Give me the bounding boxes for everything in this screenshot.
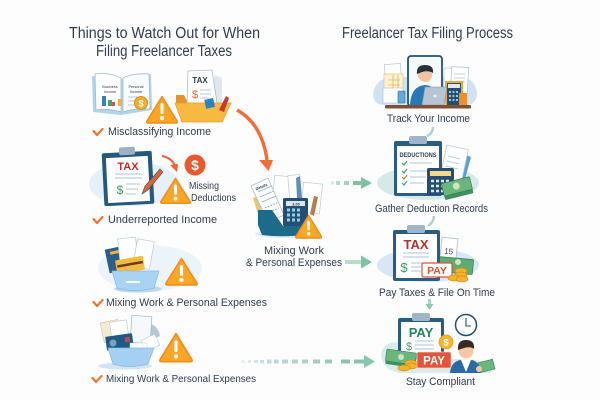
- icon: check: [94, 129, 102, 135]
- icon: dollar coin: [184, 154, 206, 176]
- icon: open ledger book: Income: [130, 90, 142, 94]
- blob: [373, 77, 477, 105]
- icon: check: [92, 376, 102, 382]
- icon: calculator: [445, 81, 467, 105]
- icon: documents right: [444, 67, 469, 93]
- icon: money stack: [436, 256, 474, 275]
- icon: cash in hand: [476, 359, 495, 373]
- icon: clipboard: $: [406, 341, 412, 353]
- icon: paper bowl: [105, 237, 162, 292]
- arrow: to pay taxes: [345, 256, 372, 268]
- icon: tax folder: [175, 70, 231, 122]
- label: Mixing Work: [264, 245, 324, 257]
- arrow: curved to gather: [427, 127, 433, 136]
- panel: stay compliant: [381, 313, 495, 388]
- right heading: Freelancer Tax Filing Process: [342, 25, 513, 42]
- icon: gold coin: $: [443, 338, 449, 348]
- icon: documents left: [383, 63, 405, 103]
- icon: open ledger book: Personal: [128, 85, 144, 89]
- icon: phone and person: [408, 56, 442, 106]
- label: Pay Taxes & File On Time: [379, 287, 495, 299]
- icon: open ledger book: Income: [104, 90, 116, 94]
- arrow: to stay compliant: [426, 299, 434, 310]
- icon: paper tray: Details: [255, 183, 268, 191]
- icon: clipboard: [398, 313, 444, 364]
- icon: coins: [398, 360, 417, 371]
- label: [246, 245, 342, 269]
- icon: money stack: [441, 177, 473, 200]
- icon: clipboard: [393, 225, 440, 281]
- icon: tax folder: TAX: [192, 76, 208, 85]
- icon: warning triangle: [147, 96, 177, 123]
- icon: person: [450, 340, 481, 373]
- icon: clipboard: PAY: [409, 325, 434, 340]
- left heading: Filing Freelancer Taxes: [96, 43, 232, 60]
- panel: pay taxes: [377, 225, 495, 299]
- icon: calculator: [427, 168, 454, 195]
- callout: missing deductions: Missing: [189, 181, 219, 192]
- blob: [98, 245, 202, 291]
- panel: track your income: [373, 56, 477, 125]
- panel: underreported income: [89, 147, 236, 226]
- label: Mixing Work & Personal Expenses: [106, 373, 256, 385]
- icon: open ledger book: $: [138, 98, 144, 108]
- panel: mixing expenses centre: [246, 175, 342, 269]
- icon: clipboard: DEDUCTIONS: [400, 152, 437, 159]
- icon: dollar coin: $: [191, 157, 199, 173]
- icon: clipboard: $: [400, 260, 408, 275]
- callout: missing deductions: [189, 181, 236, 204]
- icon: desk: [385, 105, 471, 108]
- icon: clipboard: TAX: [117, 161, 139, 173]
- icon: check: [94, 300, 102, 306]
- callout: missing deductions: Deductions: [191, 193, 236, 204]
- arrow: orange curve: [237, 110, 273, 171]
- label: Underreported Income: [108, 214, 217, 226]
- icon: calendar: 15: [444, 247, 454, 256]
- blob: [89, 162, 179, 206]
- panel: misclassifying income: [92, 70, 231, 138]
- arrow: long dotted to compliant: [242, 355, 375, 368]
- icon: coins: [448, 268, 468, 282]
- icon: clipboard: [102, 147, 154, 206]
- label: Mixing Work & Personal Expenses: [106, 297, 267, 309]
- left heading: [69, 25, 260, 60]
- label: Misclassifying Income: [108, 126, 211, 138]
- panel: mixing expenses 1: [94, 237, 267, 309]
- label: & Personal Expenses: [246, 257, 342, 269]
- panel: gather deduction records: [375, 136, 488, 215]
- icon: check: [94, 217, 102, 223]
- icon: pencil: [142, 169, 163, 194]
- icon: clipboard: TAX: [403, 237, 429, 252]
- icon: warning triangle: [160, 334, 192, 362]
- icon: laptop: [422, 87, 447, 105]
- icon: open ledger book: Business: [102, 85, 118, 89]
- icon: calculator: 3.00: [292, 202, 300, 206]
- icon: warning triangle: [296, 215, 322, 238]
- icon: warning triangle: [161, 178, 190, 203]
- panel: mixing expenses 2: [92, 315, 256, 385]
- icon: pay sign: PAY: [423, 356, 445, 368]
- arrow: curved to pay: [428, 216, 434, 226]
- left heading: Things to Watch Out for When: [69, 25, 260, 42]
- icon: clock: [456, 314, 476, 336]
- blob: [377, 166, 479, 200]
- label: Track Your Income: [387, 113, 470, 125]
- label: Stay Compliant: [406, 376, 475, 388]
- label: Gather Deduction Records: [375, 203, 488, 215]
- blob: [377, 248, 479, 282]
- icon: paper: [440, 145, 471, 190]
- icon: open ledger book: [92, 74, 152, 115]
- icon: paper bowl with card: [98, 315, 160, 370]
- icon: warning triangle: [166, 258, 197, 285]
- arrow: dotted to gather: [331, 177, 372, 189]
- icon: money left: [385, 349, 417, 368]
- arrow: small red: [162, 156, 178, 172]
- icon: clipboard: $: [117, 183, 124, 197]
- blob: [381, 342, 492, 373]
- icon: tax folder: $: [192, 89, 198, 101]
- icon: pay stamp: PAY: [427, 265, 447, 277]
